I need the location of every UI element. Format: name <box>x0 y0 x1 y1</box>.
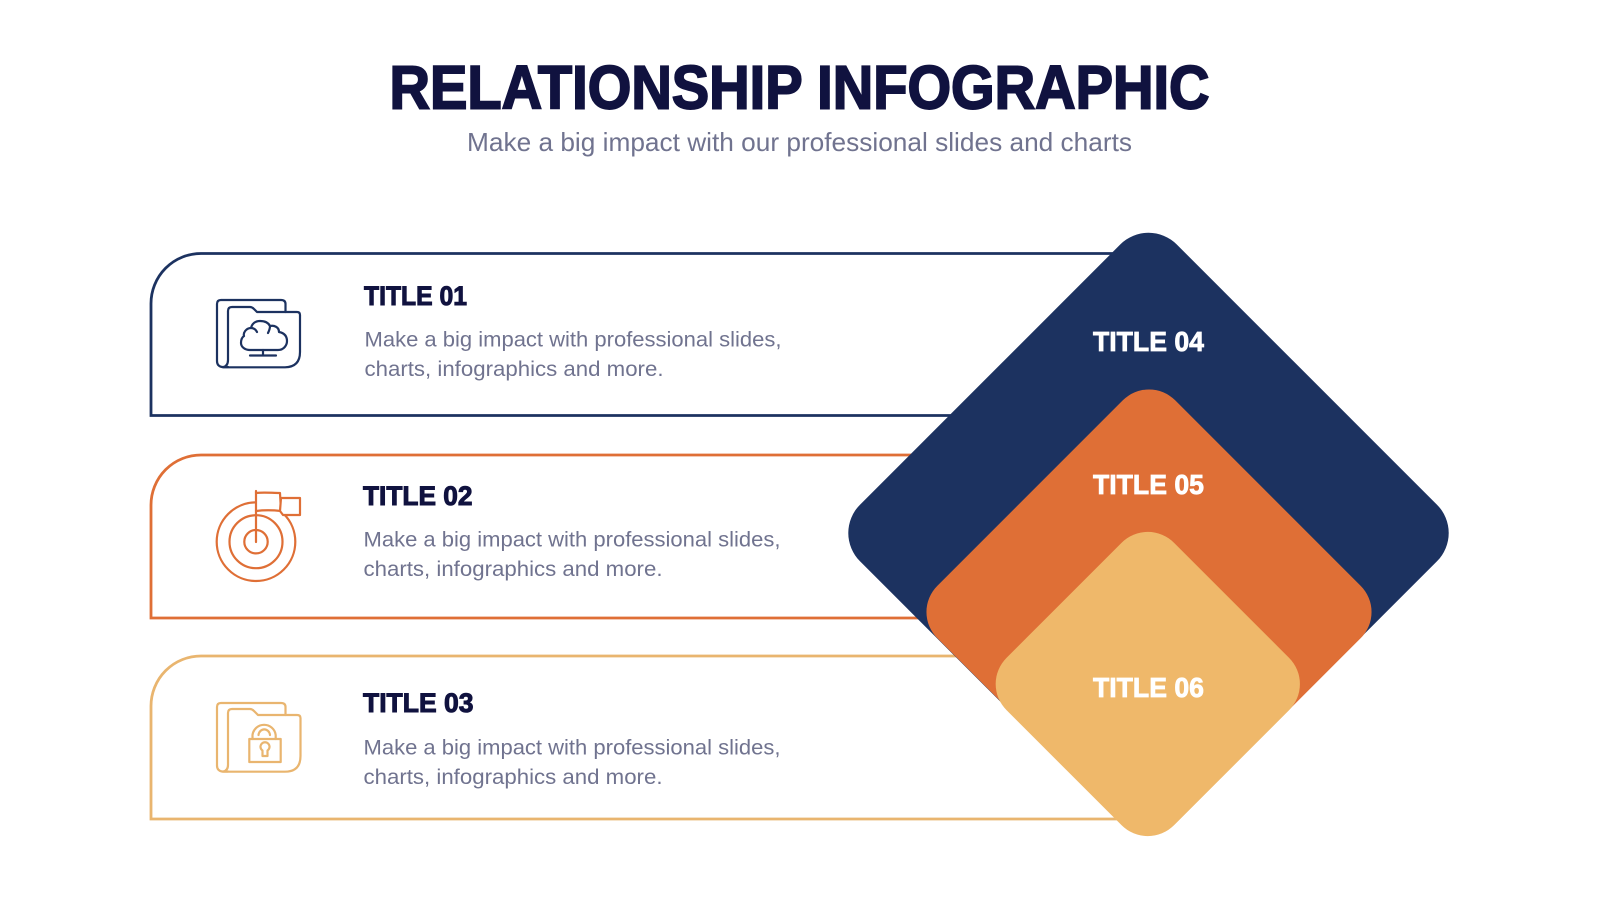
shape: yellow diamond <box>980 517 1315 851</box>
heading: title 01: TITLE 01 <box>364 281 467 311</box>
panel: title 01 <box>151 254 1150 416</box>
shape: navy diamond <box>832 216 1465 850</box>
panel: title 03 <box>151 656 1150 819</box>
icon: folder with padlock <box>217 703 300 772</box>
heading: title 03: TITLE 03 <box>363 688 474 718</box>
text block 02 <box>364 528 780 581</box>
diamond: title 05 <box>911 374 1387 850</box>
icon: target with flags <box>217 491 300 581</box>
heading: title 02: TITLE 02 <box>363 481 472 511</box>
panel outline 03 <box>151 656 1150 819</box>
text block 03 <box>364 736 780 789</box>
label: title 04: TITLE 04 <box>1093 326 1204 357</box>
subtitle: Make a big impact with our professional slides and charts <box>467 127 1132 157</box>
panel outline 01 <box>151 254 1150 416</box>
title: RELATIONSHIP INFOGRAPHIC <box>390 54 1210 122</box>
label: title 06: TITLE 06 <box>1093 672 1204 703</box>
text block 03: charts, infographics and more. <box>364 766 662 789</box>
diamond: title 04 <box>832 216 1465 850</box>
label: title 05: TITLE 05 <box>1093 469 1204 500</box>
text block 03: Make a big impact with professional slides, <box>364 736 780 760</box>
text block 02: charts, infographics and more. <box>364 558 662 581</box>
panel: title 02 <box>151 455 1150 618</box>
icon: folder with cloud <box>217 300 300 367</box>
diamond: title 06 <box>980 517 1315 851</box>
panel outline 02 <box>151 455 1150 618</box>
text block 02: Make a big impact with professional slides, <box>364 528 780 552</box>
text block 01 <box>364 329 782 381</box>
text block 01: charts, infographics and more. <box>364 358 664 381</box>
text block 01: Make a big impact with professional slides, <box>364 329 782 352</box>
shape: orange diamond <box>911 374 1387 850</box>
